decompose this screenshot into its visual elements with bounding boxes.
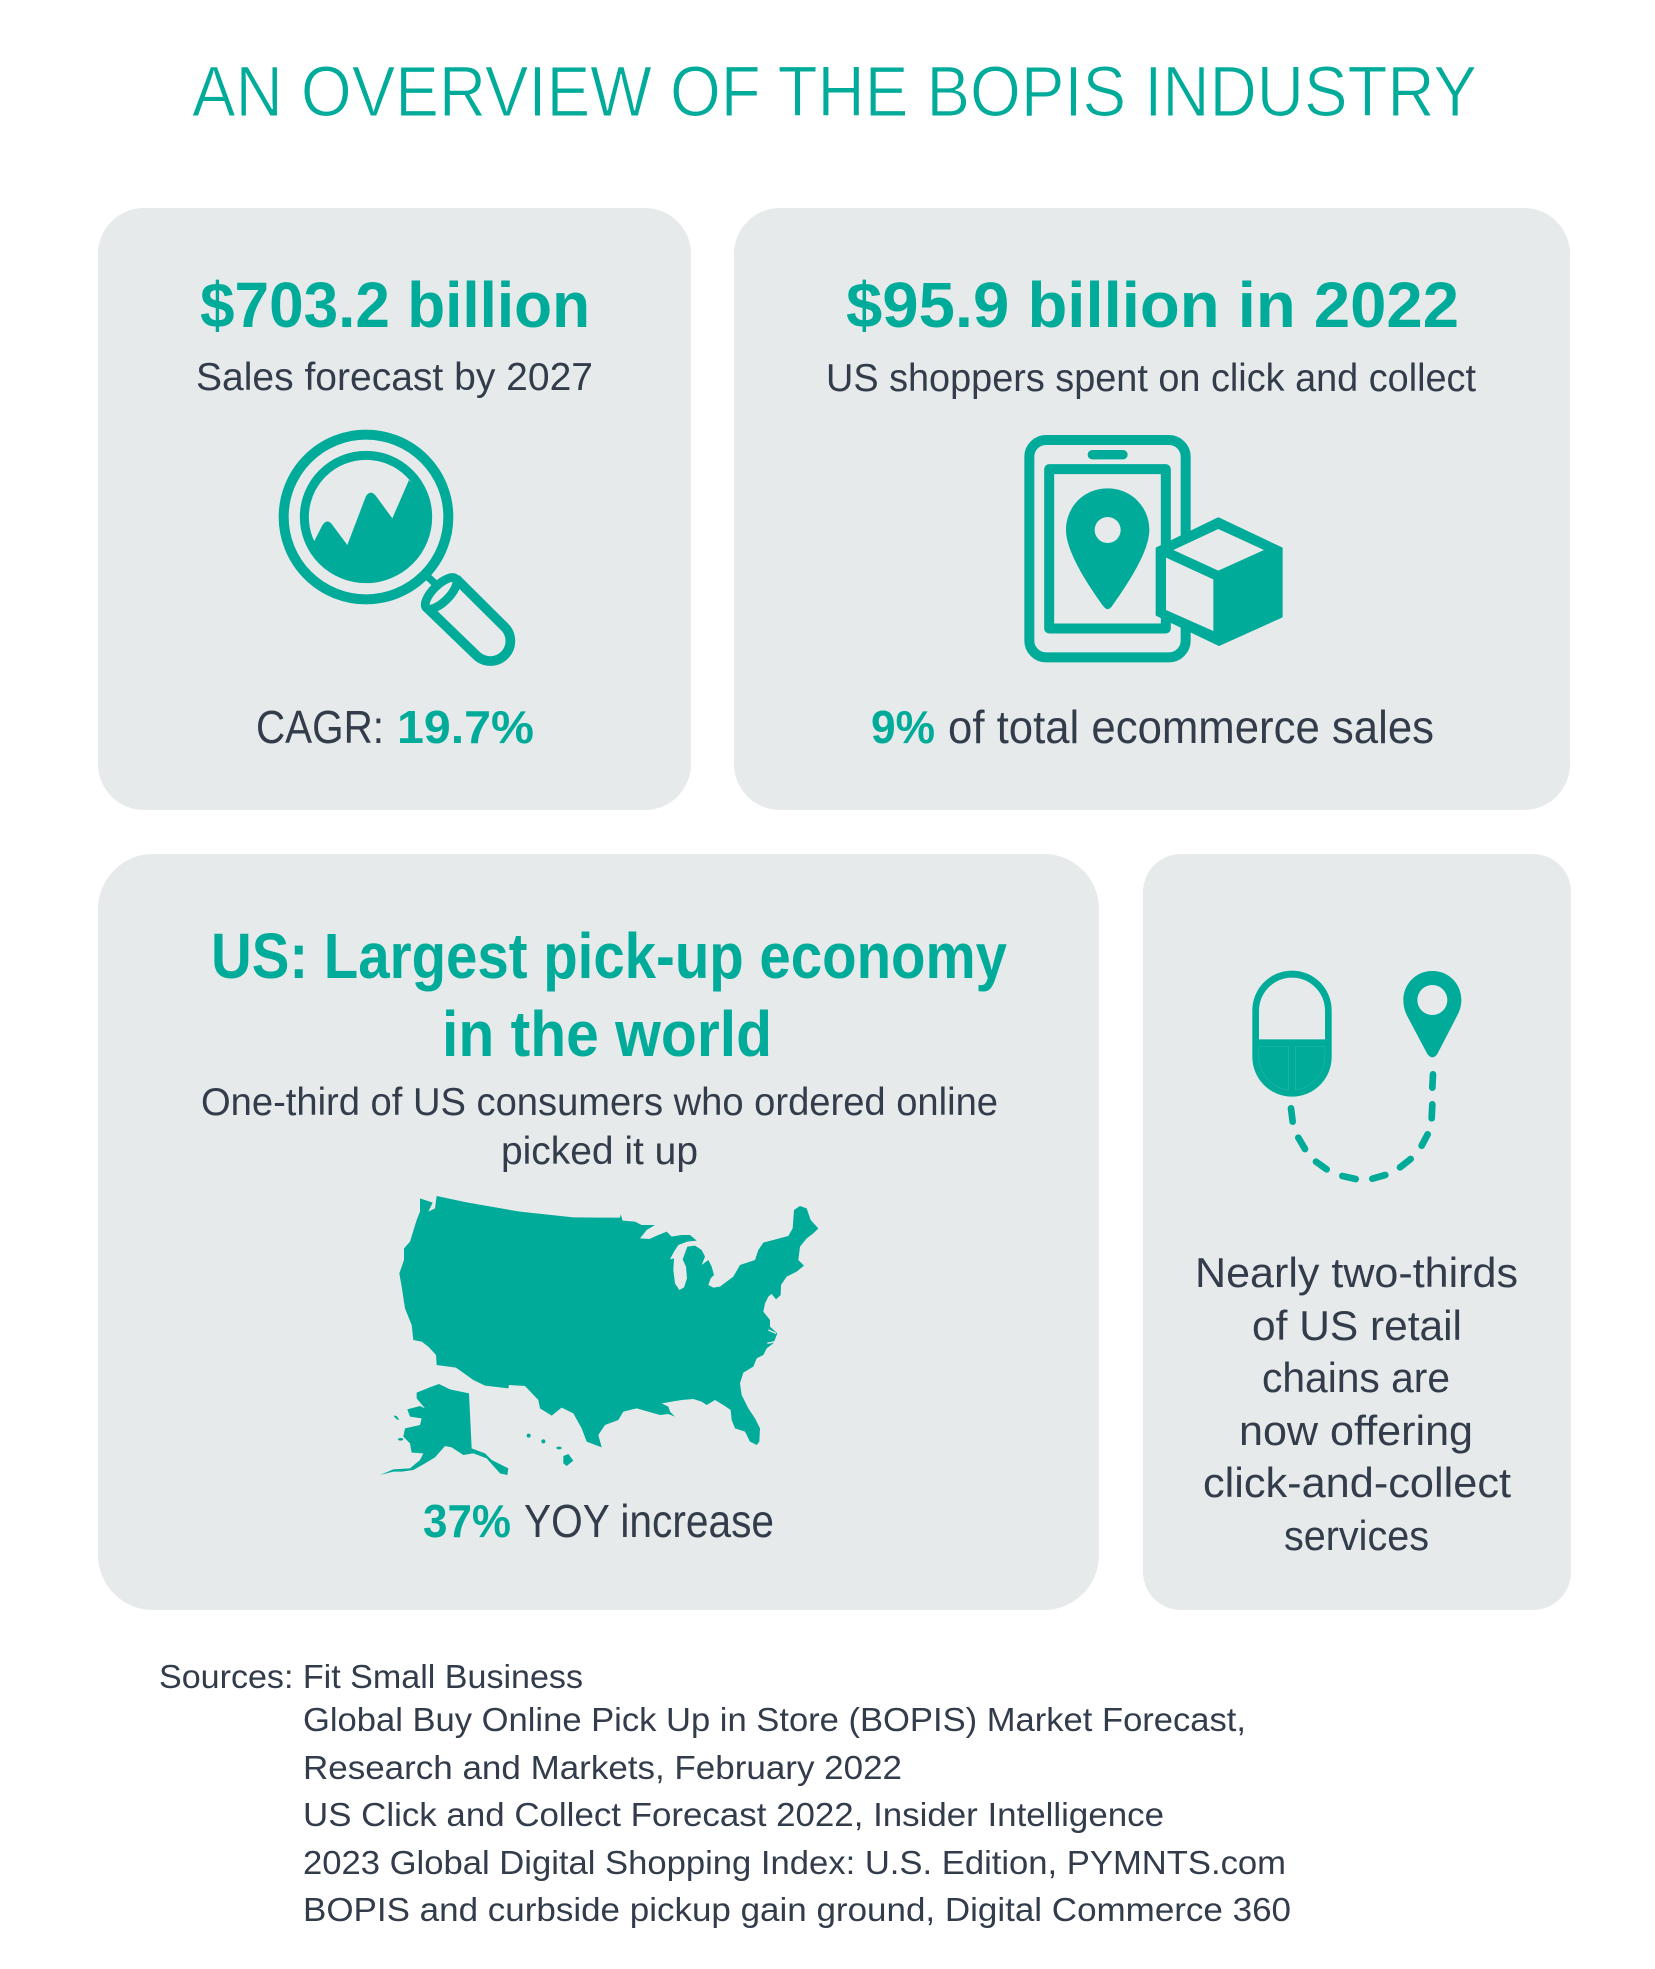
heading: $95.9 billion in 2022: $95.9 billion in 2022: [846, 269, 1459, 341]
sources: Sources: Fit Small Business: [159, 1658, 583, 1695]
sources: Research and Markets, February 2022: [303, 1749, 902, 1786]
text: one-third of consumers: picked it up: [501, 1130, 698, 1173]
text: US shoppers spent: US shoppers spent on click and collect: [826, 357, 1476, 400]
title: AN OVERVIEW OF THE BOPIS INDUSTRY: [192, 53, 1477, 132]
text: 9% of total ecommerce sales: 9%: [871, 701, 935, 753]
text: 37% YOY increase: YOY increase: [524, 1495, 774, 1547]
text: nearly two-thirds of retail chains: chains are: [1262, 1354, 1450, 1401]
panel: largest pick-up economy: [98, 854, 1099, 1610]
text: CAGR: 19.7%: [397, 701, 534, 753]
text: nearly two-thirds of retail chains: click-and-collect: [1203, 1459, 1511, 1506]
text: 37% YOY increase: 37%: [423, 1495, 511, 1547]
heading: $703.2 billion: $703.2 billion: [200, 269, 590, 341]
text: nearly two-thirds of retail chains: now offering: [1239, 1407, 1473, 1454]
icon: magnifier with chart: [284, 435, 510, 661]
sources: 2023 Global Digital Shopping Index: U.S. Edition, PYMNTS.com: [303, 1844, 1286, 1881]
sources: US Click and Collect Forecast 2022, Insider Intelligence: [303, 1796, 1164, 1833]
text: nearly two-thirds of retail chains: Nearly two-thirds: [1195, 1249, 1518, 1296]
text: CAGR: CAGR:: [256, 701, 384, 753]
text: nearly two-thirds of retail chains: of US retail: [1252, 1302, 1462, 1349]
text: sales forecast by 2027: Sales forecast by 2027: [196, 356, 593, 399]
text: CAGR: [256, 701, 534, 753]
sources: Global Buy Online Pick Up in Store (BOPIS) Market Forecast,: [303, 1701, 1246, 1738]
icon: mouse to location pin: [1252, 971, 1461, 1179]
panel: sales forecast: [98, 208, 691, 810]
text: one-third of consumers: [201, 1081, 998, 1173]
heading: US largest pick-up economy: US: Largest pick-up economy: [211, 920, 1007, 992]
panel: click and collect spend: [734, 208, 1570, 810]
text: one-third of consumers: One-third of US consumers who ordered online: [201, 1081, 998, 1124]
map: United States: [380, 1196, 818, 1475]
heading: US largest pick-up economy: [211, 920, 1007, 1070]
text: nearly two-thirds of retail chains: services: [1284, 1512, 1429, 1559]
heading: US largest pick-up economy: in the world: [442, 998, 772, 1070]
sources: [159, 1658, 1291, 1928]
text: 9% of total ecommerce sales: of total ecommerce sales: [948, 701, 1434, 753]
text: nearly two-thirds of retail chains: [1195, 1249, 1518, 1559]
icon: phone with pin and box: [1029, 440, 1282, 657]
text: 37% YOY increase: [423, 1495, 774, 1547]
panel: retail chains: [1143, 854, 1571, 1610]
sources: BOPIS and curbside pickup gain ground, Digital Commerce 360: [303, 1891, 1291, 1928]
